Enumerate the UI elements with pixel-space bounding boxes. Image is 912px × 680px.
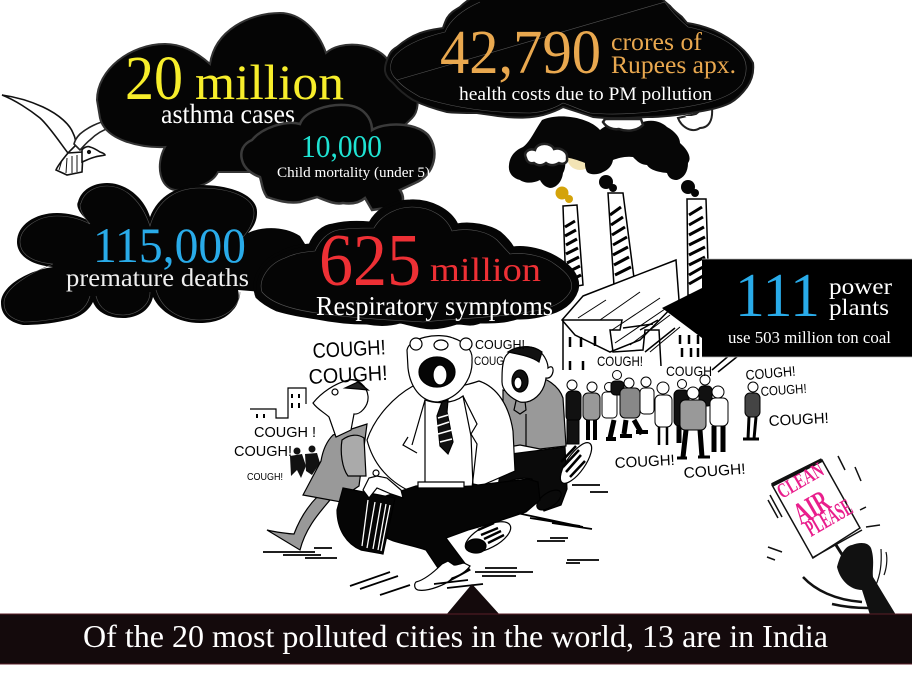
text: sign wording: CLEAN — [772, 458, 828, 503]
speech text: COUGH labels: COUGH ! — [254, 424, 316, 441]
cloud: 10,000 child mortality — [241, 105, 434, 210]
speech text: COUGH labels: COUGH! — [745, 363, 796, 383]
illustration: man in gray on the right — [498, 347, 597, 514]
text: health costs: health costs due to PM pollution — [459, 85, 712, 105]
text: 42,790: 42,790 — [440, 19, 601, 87]
cloud: 20 million asthma cases — [97, 13, 418, 190]
text: 10,000: 10,000 — [301, 128, 382, 164]
speech text: COUGH labels: COUGH! — [760, 381, 807, 399]
text: plants: plants — [829, 295, 889, 320]
speech text: COUGH labels: COUGH! — [247, 472, 283, 483]
text: 115,000: 115,000 — [93, 217, 246, 273]
speech text: COUGH labels: COUGH! — [597, 353, 643, 369]
illustration: smoke plumes — [509, 106, 712, 203]
speech text: COUGH labels — [234, 336, 829, 483]
text: crores of: crores of — [611, 29, 703, 56]
callout: 111 power plants — [662, 259, 912, 357]
speech text: COUGH labels: COUGH — [666, 363, 712, 379]
text: power: power — [829, 274, 892, 299]
text: sign wording — [772, 458, 857, 542]
text: Rupees apx.: Rupees apx. — [611, 52, 736, 79]
text: million: million — [430, 252, 541, 289]
illustration: factory with chimneys — [562, 193, 738, 372]
illustration: bird — [2, 95, 148, 175]
cloud: 42,790 crores health costs — [385, 0, 753, 118]
speech text: COUGH labels: COUGH! — [768, 410, 829, 430]
text: million unit: million — [195, 54, 344, 110]
illustration: fat coughing man with briefcase — [337, 336, 540, 590]
speech text: COUGH labels: COUG — [474, 354, 504, 368]
text: 111: 111 — [735, 262, 820, 330]
text: headline: Of the 20 most polluted cities in the world, 13 are in India — [83, 618, 828, 654]
text: 20: 20 — [125, 45, 183, 113]
text: sign wording: PLEASE — [801, 495, 857, 542]
text: premature deaths: premature deaths — [66, 265, 249, 292]
illustration: crowd in the distance — [566, 370, 760, 458]
illustration: man in gray on the left — [267, 380, 368, 550]
text: sign wording: AIR — [787, 483, 836, 531]
text: child mortality: Child mortality (under 5) — [277, 165, 430, 181]
speech text: COUGH labels: COUGH! — [475, 337, 525, 352]
text: coal use: use 503 million ton coal — [728, 328, 891, 347]
illustration: small far figures — [290, 446, 320, 478]
text: asthma cases: asthma cases — [161, 99, 295, 129]
illustration: hand holding clean air sign — [767, 456, 896, 615]
cloud: 625 million respiratory symptoms — [255, 201, 578, 328]
illustration: ground strokes — [263, 485, 608, 595]
speech text: COUGH labels: COUGH! — [312, 336, 386, 363]
speech text: COUGH labels: COUGH! — [234, 443, 292, 460]
text: respiratory symptoms: Respiratory symptoms — [316, 291, 553, 321]
text: 625: 625 — [319, 220, 421, 302]
illustration: small buildings behind left man — [250, 388, 306, 418]
speech text: COUGH labels: COUGH! — [614, 452, 675, 472]
speech text: COUGH labels: COUGH! — [308, 362, 388, 389]
cloud: 115,000 premature deaths — [1, 183, 315, 325]
speech text: COUGH labels: COUGH! — [683, 461, 746, 482]
banner: bottom headline — [0, 584, 912, 664]
